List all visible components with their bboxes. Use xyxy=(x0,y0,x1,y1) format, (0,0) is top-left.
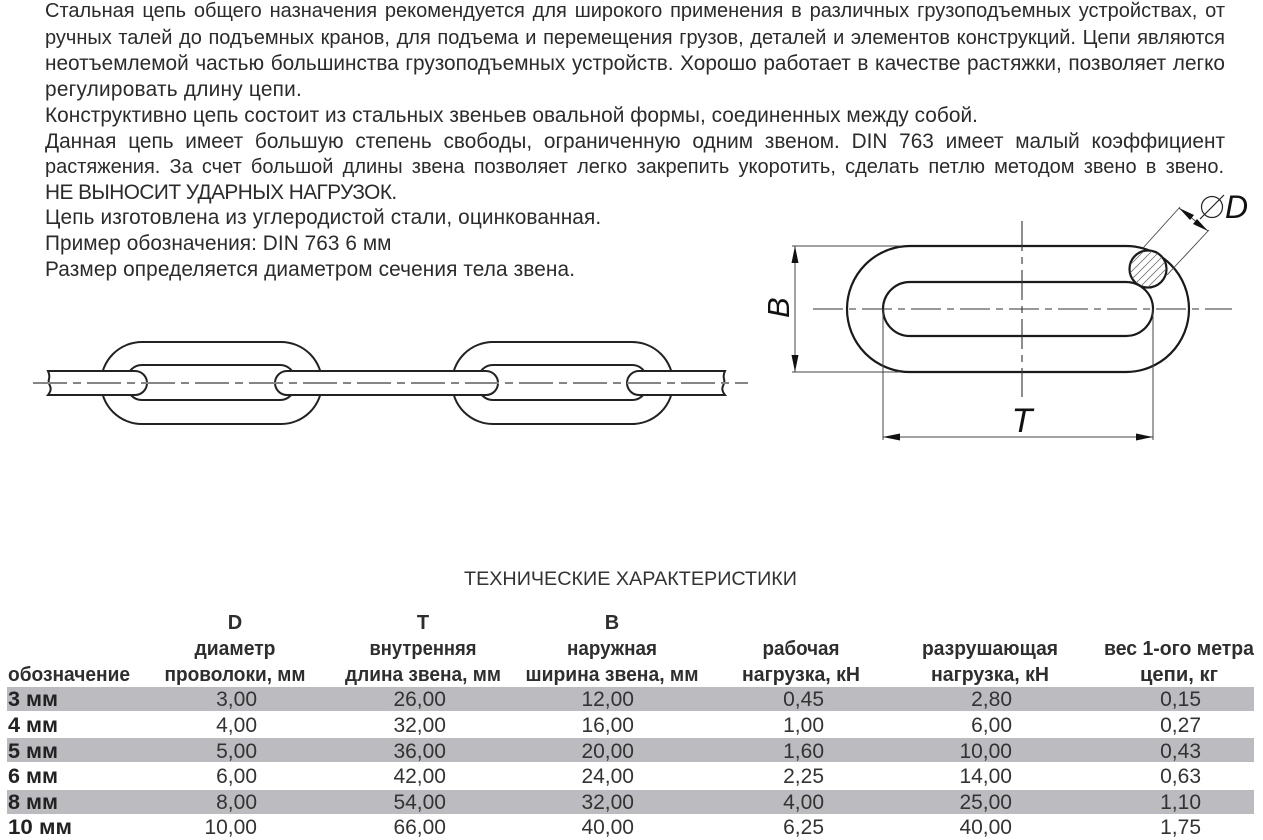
table row: 5 mm: 20,00 xyxy=(581,740,634,763)
chain link: right xyxy=(452,342,673,424)
table header: цепи, кг xyxy=(1140,664,1218,686)
table row: 5 mm: 10,00 xyxy=(959,740,1012,763)
table row: 8 mm: 8,00 xyxy=(216,791,257,814)
table row: 3 mm: 3,00 xyxy=(216,688,257,711)
chain rod: middle xyxy=(275,371,498,395)
table header: нагрузка, кН xyxy=(931,664,1049,686)
table header: T xyxy=(417,612,429,634)
chain link: left xyxy=(101,342,322,424)
dimension D: D xyxy=(1225,189,1248,225)
table row: 10 mm: 40,00 xyxy=(959,816,1012,839)
axis lines xyxy=(813,221,1232,397)
table row: 4 mm: 16,00 xyxy=(581,714,634,737)
table row: 3 mm: 0,45 xyxy=(783,688,824,711)
table header: рабочая xyxy=(762,638,840,660)
table row: 4 mm: 0,27 xyxy=(1160,714,1201,737)
table header: нагрузка, кН xyxy=(742,664,860,686)
chain rod: left end xyxy=(48,371,147,395)
table row: 8 mm xyxy=(8,791,1201,814)
text block: chain description: Данная цепь имеет большую степень свободы, ограниченную одним звеном. DIN 763 имеет малый коэффициент xyxy=(45,130,1225,153)
table row: 10 mm: 66,00 xyxy=(393,816,446,839)
text block: chain description: Конструктивно цепь состоит из стальных звеньев овальной формы, соединенных между собой. xyxy=(45,104,978,127)
chain illustration xyxy=(33,342,748,424)
table row: 10 mm xyxy=(8,816,1201,839)
table row: 4 mm xyxy=(8,714,1201,737)
table row: 6 mm: 24,00 xyxy=(581,765,634,788)
table row: 4 mm: 1,00 xyxy=(783,714,824,737)
chain rod: right end xyxy=(627,371,725,395)
wire cross-section xyxy=(1128,250,1168,289)
text block: chain description: НЕ ВЫНОСИТ УДАРНЫХ НАГРУЗОК. xyxy=(45,181,397,204)
table header: ширина звена, мм xyxy=(526,664,698,686)
table row: 6 mm: 0,63 xyxy=(1160,765,1201,788)
table row: 8 mm: 4,00 xyxy=(783,791,824,814)
dimension D xyxy=(1143,189,1248,275)
table row: 4 mm: 6,00 xyxy=(971,714,1012,737)
table row: 10 mm: 10 мм xyxy=(8,816,72,839)
specifications table xyxy=(7,612,1255,839)
table row: 3 mm: 12,00 xyxy=(581,688,634,711)
dimensioned link drawing xyxy=(761,189,1248,440)
text block: chain description: Пример обозначения: DIN 763 6 мм xyxy=(45,232,392,255)
text block: chain description: регулировать длину цепи. xyxy=(45,78,302,101)
table row: 8 mm: 8 мм xyxy=(8,791,58,814)
table row: 3 mm: 26,00 xyxy=(393,688,446,711)
table header: обозначение xyxy=(8,664,130,686)
chain centerline xyxy=(33,382,748,384)
table row: 3 mm: 0,15 xyxy=(1160,688,1201,711)
table row: 4 mm: 4 мм xyxy=(8,714,58,737)
table header: B xyxy=(605,612,619,634)
table row: 5 mm: 5,00 xyxy=(216,740,257,763)
table row: 3 mm xyxy=(8,688,1201,711)
dimension T: T xyxy=(1012,402,1035,440)
table row: 5 mm: 5 мм xyxy=(8,740,58,763)
text block: chain description: ручных талей до подъемных кранов, для подъема и перемещения грузов, деталей и элементов конструкций. Цепи являются xyxy=(45,27,1225,49)
table header: вес 1-ого метра xyxy=(1104,638,1255,660)
table row: 10 mm: 1,75 xyxy=(1160,816,1201,839)
dimension T xyxy=(883,309,1153,440)
table row: 6 mm: 6,00 xyxy=(216,765,257,788)
text block: chain description: неотъемлемой частью большинства грузоподъемных устройств. Хорошо работает в качестве растяжки, позволяет легко xyxy=(45,52,1225,75)
table row: 8 mm: 54,00 xyxy=(393,791,446,814)
text block: chain description: Стальная цепь общего назначения рекомендуется для широкого применения в различных грузоподъемных устройствах, от xyxy=(45,0,1225,22)
table row: 6 mm: 42,00 xyxy=(393,765,446,788)
table header xyxy=(8,612,1255,686)
dimension B: B xyxy=(761,297,796,318)
table row: 6 mm xyxy=(8,765,1201,788)
table row: 3 mm: 3 мм xyxy=(8,688,58,711)
table header: проволоки, мм xyxy=(164,664,306,686)
table header: длина звена, мм xyxy=(345,664,501,686)
link outline xyxy=(847,246,1189,372)
table row: 8 mm: 1,10 xyxy=(1160,791,1201,814)
table row: 10 mm: 40,00 xyxy=(581,816,634,839)
text block: chain description: Цепь изготовлена из углеродистой стали, оцинкованная. xyxy=(45,206,601,229)
table row: 4 mm: 4,00 xyxy=(216,714,257,737)
table header: диаметр xyxy=(194,638,276,660)
table row: 6 mm: 6 мм xyxy=(8,765,58,788)
table row: 8 mm: 32,00 xyxy=(581,791,634,814)
text block: chain description: Размер определяется диаметром сечения тела звена. xyxy=(45,258,575,281)
text block: chain description xyxy=(45,0,1225,281)
table row: 3 mm: 2,80 xyxy=(971,688,1012,711)
table row: 10 mm: 6,25 xyxy=(783,816,824,839)
table row: 4 mm: 32,00 xyxy=(393,714,446,737)
table stripes xyxy=(7,687,1254,814)
table row: 10 mm: 10,00 xyxy=(204,816,257,839)
table row: 5 mm xyxy=(8,740,1201,763)
table row: 5 mm: 36,00 xyxy=(393,740,446,763)
dimension B xyxy=(761,246,900,372)
table row: 5 mm: 1,60 xyxy=(783,740,824,763)
text block: chain description: растяжения. За счет большой длины звена позволяет легко закрепить укоротить, сделать петлю методом звено в звено. xyxy=(45,156,1224,178)
table row: 6 mm: 2,25 xyxy=(783,765,824,788)
table row: 8 mm: 25,00 xyxy=(959,791,1012,814)
table header: наружная xyxy=(567,638,657,660)
table header: разрушающая xyxy=(922,638,1058,660)
table row: 5 mm: 0,43 xyxy=(1160,740,1201,763)
table title: ТЕХНИЧЕСКИЕ ХАРАКТЕРИСТИКИ xyxy=(464,568,797,590)
table row: 6 mm: 14,00 xyxy=(959,765,1012,788)
table header: внутренняя xyxy=(370,638,476,660)
table header: D xyxy=(228,612,242,634)
